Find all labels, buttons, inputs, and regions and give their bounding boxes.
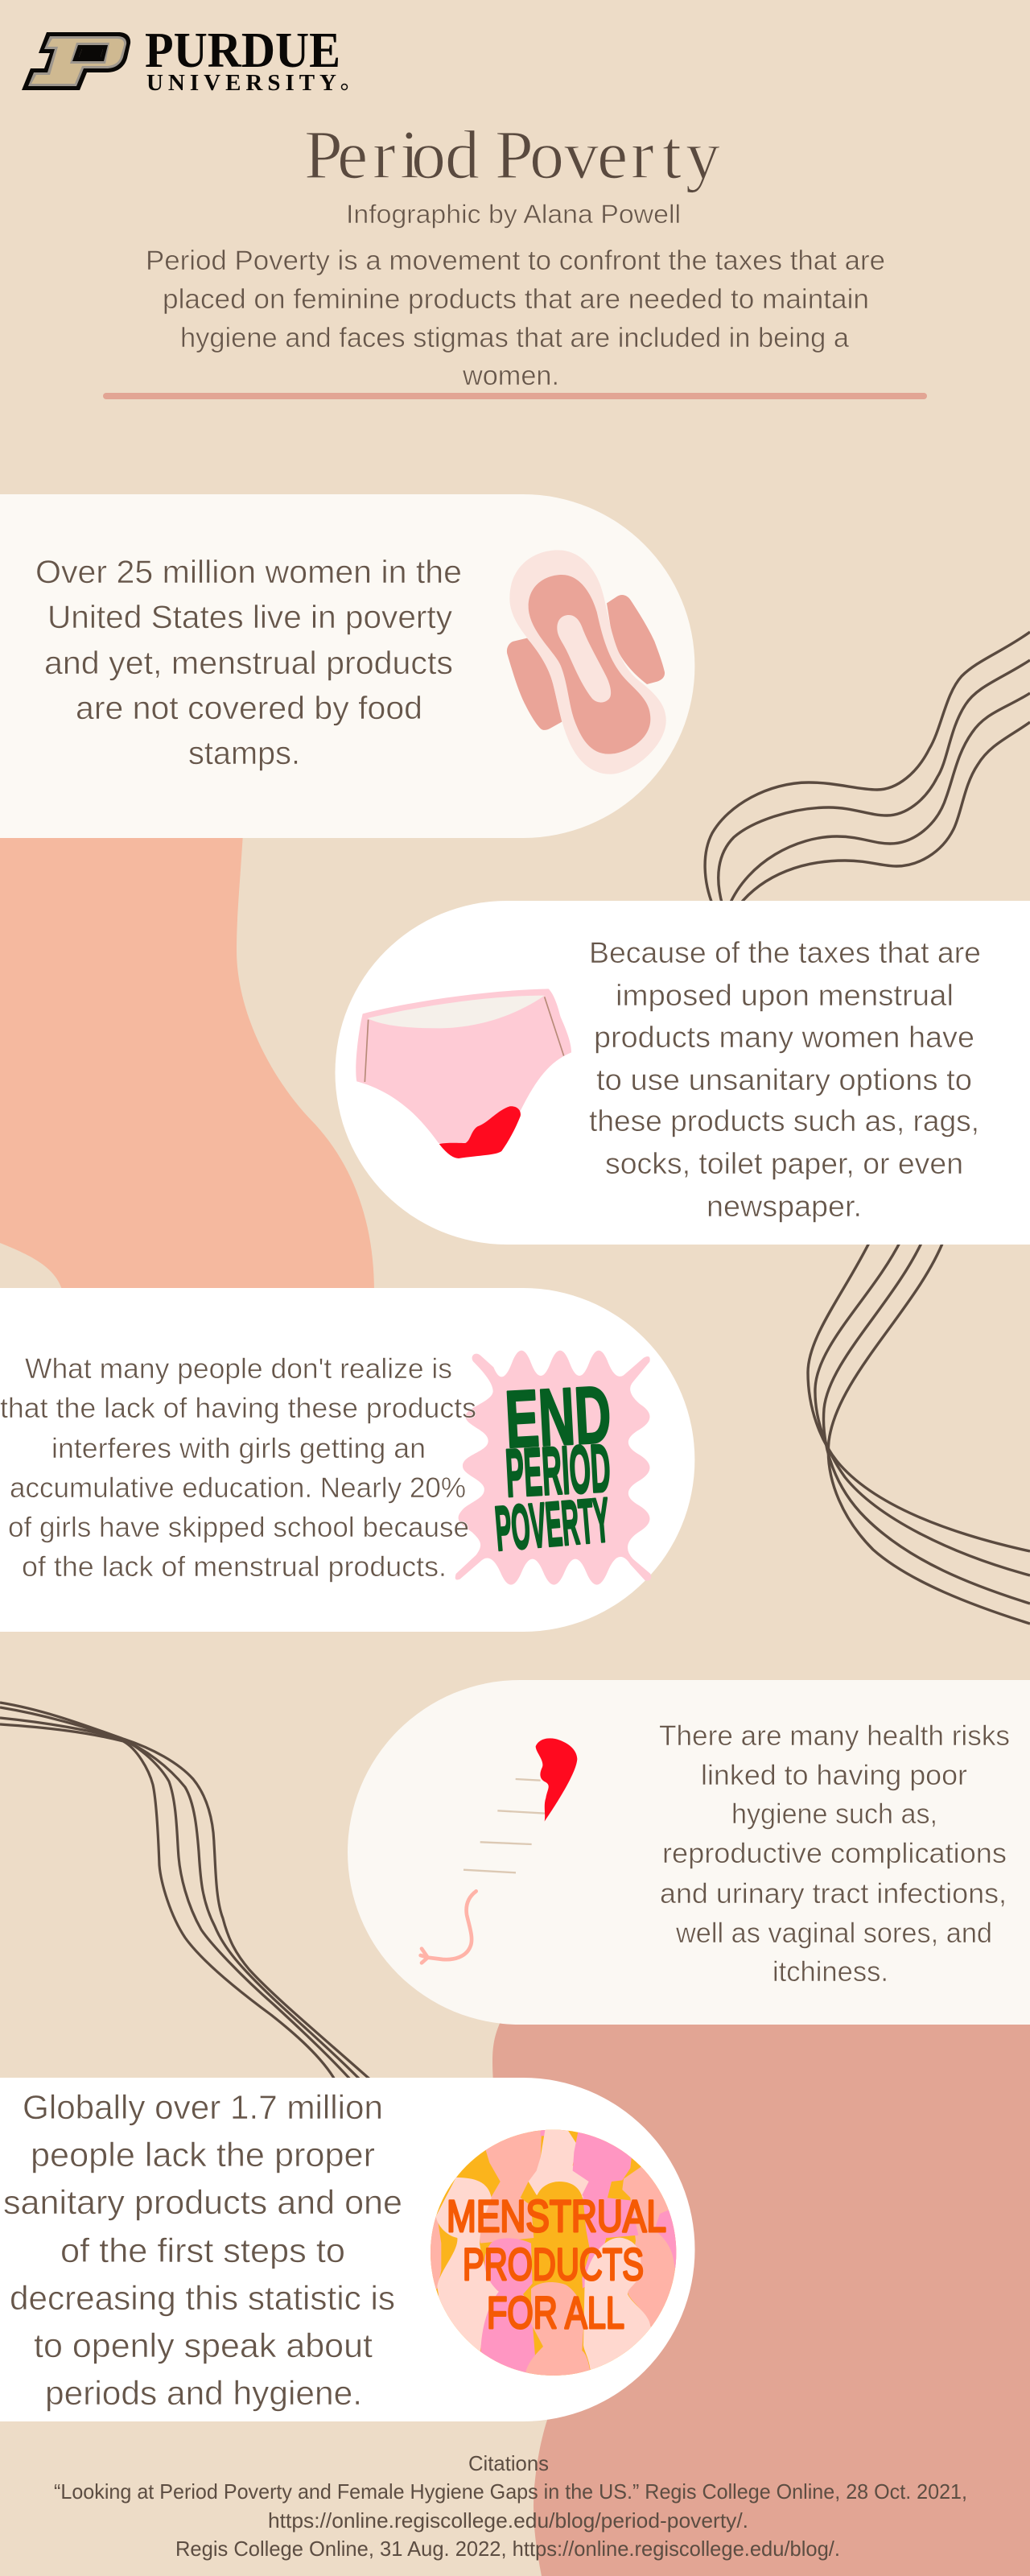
text block: What many people don't realize is xyxy=(25,1353,452,1385)
card background xyxy=(0,2078,695,2421)
icon: Purdue P xyxy=(22,32,130,90)
icon: tampon xyxy=(421,1738,577,1963)
text block: newspaper. xyxy=(707,1190,862,1223)
text block: reproductive complications xyxy=(662,1838,1007,1869)
panel: food stamps xyxy=(0,494,694,838)
text block: stamps. xyxy=(188,736,300,771)
text block: are not covered by food xyxy=(76,691,422,726)
logo: Purdue University xyxy=(22,23,348,96)
text block: hygiene such as, xyxy=(731,1798,937,1830)
intro text block: hygiene and faces stigmas that are included in being a xyxy=(180,323,849,353)
citations: https://online.regiscollege.edu/blog/period-poverty/. xyxy=(268,2508,748,2533)
text block: sanitary products and one xyxy=(3,2183,402,2221)
icon: Menstrual Products For All badge: FOR ALL xyxy=(487,2287,624,2338)
text block: decreasing this statistic is xyxy=(10,2279,395,2317)
icon: registered mark xyxy=(341,84,348,90)
divider xyxy=(103,393,927,399)
text block: interferes with girls getting an xyxy=(52,1433,426,1464)
citations: “Looking at Period Poverty and Female Hygiene Gaps in the US.” Regis College Online, 28 Oct. 2021, xyxy=(54,2479,967,2504)
text block: United States live in poverty xyxy=(47,600,452,635)
text block: people lack the proper xyxy=(31,2136,375,2174)
citations: Citations xyxy=(468,2451,549,2475)
card background xyxy=(0,494,694,838)
subtitle: Infographic by Alana Powell xyxy=(346,200,681,229)
text block: well as vaginal sores, and xyxy=(675,1918,992,1949)
squiggle lines: middle right xyxy=(808,1240,1030,1624)
text block: of the lack of menstrual products. xyxy=(22,1551,447,1583)
icon: underwear xyxy=(356,989,571,1158)
text block: Because of the taxes that are xyxy=(589,936,981,969)
icon: Menstrual Products For All badge xyxy=(424,2125,684,2383)
text block: linked to having poor xyxy=(701,1760,967,1791)
text block: to openly speak about xyxy=(34,2326,373,2364)
text block: Globally over 1.7 million xyxy=(23,2088,383,2126)
card background xyxy=(335,901,1030,1245)
text block: products many women have xyxy=(594,1021,974,1054)
icon: End Period Poverty sticker: END xyxy=(503,1369,613,1465)
panel: education xyxy=(0,1288,694,1632)
intro text block: placed on feminine products that are needed to maintain xyxy=(163,284,869,315)
icon: sanitary pad xyxy=(507,550,666,774)
text block: socks, toilet paper, or even xyxy=(605,1147,963,1180)
text block: Over 25 million women in the xyxy=(35,555,462,590)
panel: speak openly xyxy=(0,2078,695,2421)
text block: of the first steps to xyxy=(60,2231,345,2269)
icon: Menstrual Products For All badge: MENSTRUAL xyxy=(447,2190,666,2241)
intro text block xyxy=(146,246,885,391)
text block: imposed upon menstrual xyxy=(616,979,954,1012)
panel: unsanitary options xyxy=(335,901,1030,1245)
intro text block: Period Poverty is a movement to confront the taxes that are xyxy=(146,246,885,276)
citations xyxy=(54,2451,967,2561)
icon: End Period Poverty sticker: POVERTY xyxy=(492,1484,612,1564)
text block: that the lack of having these products xyxy=(0,1393,476,1424)
icon: End Period Poverty sticker xyxy=(455,1351,651,1585)
text block xyxy=(3,2088,402,2412)
text block: itchiness. xyxy=(772,1956,888,1988)
icon: End Period Poverty sticker: PERIOD xyxy=(504,1430,612,1511)
text block: these products such as, rags, xyxy=(589,1104,979,1137)
text block xyxy=(589,936,981,1223)
panel: health risks xyxy=(348,1680,1030,2025)
wordmark: PURDUE: PURDUE xyxy=(145,23,340,78)
title: Period Poverty xyxy=(304,116,720,193)
text block: and yet, menstrual products xyxy=(44,646,453,681)
background blob: rose xyxy=(492,2017,1030,2576)
card background xyxy=(348,1680,1030,2025)
text block: of girls have skipped school because xyxy=(8,1512,469,1543)
text block: accumulative education. Nearly 20% xyxy=(10,1472,466,1504)
intro text block: women. xyxy=(462,361,559,391)
text block: to use unsanitary options to xyxy=(596,1063,972,1096)
card background xyxy=(0,1288,694,1632)
text block xyxy=(659,1720,1010,1988)
text block xyxy=(0,1353,476,1583)
text block: There are many health risks xyxy=(659,1720,1010,1752)
background blob: salmon xyxy=(0,833,374,1292)
wordmark: UNIVERSITY: UNIVERSITY xyxy=(146,70,336,96)
text block: and urinary tract infections, xyxy=(660,1878,1007,1909)
icon: Menstrual Products For All badge: PRODUCTS xyxy=(463,2239,644,2289)
text block xyxy=(35,555,462,771)
text block: periods and hygiene. xyxy=(45,2374,362,2412)
squiggle lines: top right xyxy=(705,632,1030,906)
squiggle lines: lower left xyxy=(0,1703,372,2081)
citations: Regis College Online, 31 Aug. 2022, https://online.regiscollege.edu/blog/. xyxy=(175,2537,840,2561)
